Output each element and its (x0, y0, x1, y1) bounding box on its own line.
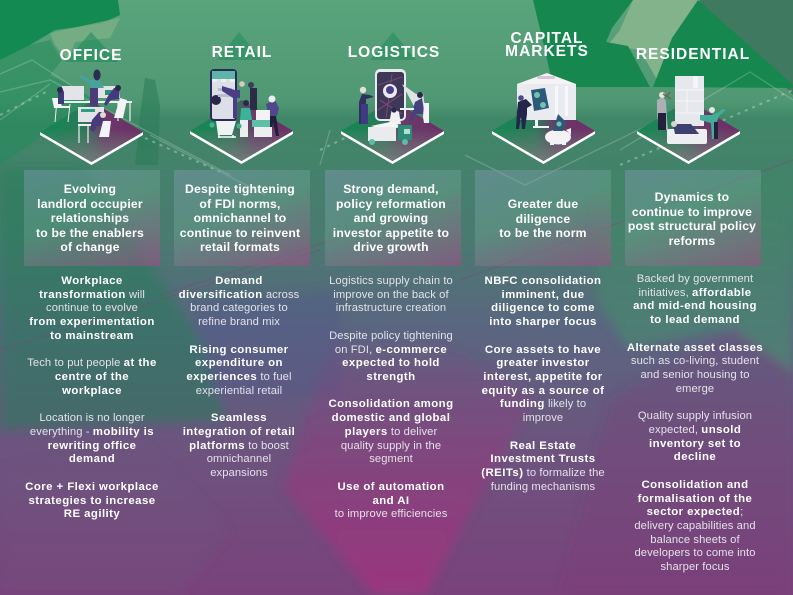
callout: retail headline: omnichannel to (194, 211, 286, 225)
callout: retail headline (174, 170, 310, 266)
text block: office outlook: continue to evolve (46, 302, 138, 314)
text block: office outlook: demand (69, 453, 115, 465)
text block: capital markets outlook: Real Estate (510, 440, 576, 452)
callout: capital markets headline: to be the norm (499, 226, 587, 240)
callout: retail headline: Despite tightening (185, 182, 295, 196)
callout: residential headline: continue to improve (632, 204, 752, 218)
text block: retail outlook: Rising consumer (189, 344, 289, 356)
heading: office: OFFICE (60, 47, 122, 64)
text block: residential outlook: sector expected; (647, 506, 743, 518)
icon: office team at desks on platform (40, 70, 143, 165)
text block: logistics outlook: expected to hold (342, 357, 440, 369)
text block: logistics outlook: infrastructure creation (336, 302, 446, 314)
text block: residential outlook: developers to come into (634, 547, 756, 559)
text block: office outlook: transformation will (39, 289, 145, 301)
text block: office outlook: everything - mobility is (30, 426, 154, 438)
text block: capital markets outlook: (REITs) to formalize the (481, 467, 605, 479)
text block: retail outlook: expenditure on (195, 357, 283, 369)
text block: logistics outlook: strength (366, 371, 416, 383)
text block: retail outlook: experiential retail (196, 385, 282, 397)
text block: retail outlook: expansions (210, 467, 268, 479)
text block: retail outlook: refine brand mix (198, 316, 280, 328)
text block: office outlook: rewriting office (48, 440, 136, 452)
text block: office outlook: to mainstream (50, 330, 134, 342)
callout: retail headline: continue to reinvent (180, 226, 300, 240)
heading: retail: RETAIL (212, 44, 272, 61)
text block: retail outlook: brand categories to (190, 302, 288, 314)
text block: residential outlook: initiatives, affordable (638, 287, 752, 299)
text block: office outlook: Core + Flexi workplace (25, 481, 159, 493)
text block: residential outlook: Consolidation and (642, 479, 748, 491)
callout: office headline: of change (60, 240, 120, 254)
text block: capital markets outlook: into sharper focus (489, 316, 597, 328)
text block: residential outlook: sharper focus (660, 561, 730, 573)
text block: residential outlook: balance sheets of (650, 534, 740, 546)
icon: shoppers with phone storefront on platform (190, 69, 293, 164)
icon: apartment tower and residents on platform (637, 76, 740, 164)
heading: capital markets: MARKETS (505, 43, 589, 60)
panel: residential (625, 46, 763, 573)
text block: logistics outlook: improve on the back of (333, 289, 449, 301)
text block: retail outlook (179, 275, 299, 479)
heading: logistics: LOGISTICS (348, 44, 440, 61)
text block: logistics outlook: Use of automation (337, 481, 444, 493)
text block: office outlook: from experimentation (29, 316, 155, 328)
text block: capital markets outlook: Investment Trusts (490, 453, 596, 465)
text block: logistics outlook: to improve efficiencies (335, 508, 447, 520)
panel: retail (174, 44, 310, 479)
text block: retail outlook: diversification across (179, 289, 299, 301)
text block: retail outlook: Seamless (211, 412, 267, 424)
text block: office outlook: strategies to increase (28, 494, 156, 506)
icon: bank building and piggy bank on platform (492, 73, 595, 164)
callout: capital markets headline: Greater due (508, 197, 578, 211)
callout: office headline: relationships (51, 211, 129, 225)
heading: capital markets (505, 30, 589, 60)
text block: office outlook: Workplace (61, 275, 123, 287)
text block: logistics outlook: Consolidation among (328, 398, 453, 410)
text block: capital markets outlook: funding mechanisms (491, 481, 595, 493)
text block: capital markets outlook: improve (523, 412, 563, 424)
callout: residential headline: Dynamics to (655, 190, 729, 204)
text block: office outlook: Tech to put people at the (27, 357, 157, 369)
text block: logistics outlook: quality supply in the (341, 440, 441, 452)
text block: logistics outlook: domestic and global (332, 412, 450, 424)
panel: office (24, 47, 160, 520)
text block: logistics outlook: Despite policy tightening (329, 330, 453, 342)
panel: capital markets (475, 30, 611, 493)
text block: residential outlook: Quality supply infusion (638, 410, 752, 422)
text block: office outlook: Location is no longer (39, 412, 145, 424)
text block: residential outlook: inventory set to (649, 438, 741, 450)
callout: retail headline: retail formats (200, 240, 280, 254)
text block: logistics outlook: segment (369, 453, 413, 465)
text block: logistics outlook: on FDI, e-commerce (335, 344, 447, 356)
callout: logistics headline: and growing (354, 211, 428, 225)
text block: capital markets outlook: Core assets to have (485, 344, 601, 356)
text block: residential outlook (627, 273, 763, 573)
callout: capital markets headline: diligence (516, 212, 570, 226)
text block: residential outlook: formalisation of the (638, 492, 752, 504)
text block: logistics outlook (328, 275, 453, 520)
text block: residential outlook: Alternate asset classes (627, 342, 763, 354)
callout: office headline: landlord occupier (37, 196, 143, 210)
text block: office outlook: workplace (62, 385, 122, 397)
text block: residential outlook: emerge (676, 383, 714, 395)
text block: office outlook (25, 275, 159, 520)
text block: capital markets outlook: equity as a source of (482, 385, 604, 397)
text block: logistics outlook: and AI (372, 494, 410, 506)
text block: logistics outlook: Logistics supply chain to (329, 275, 453, 287)
callout: logistics headline: policy reformation (336, 196, 446, 210)
callout: residential headline: post structural policy (628, 219, 756, 233)
text block: logistics outlook: players to deliver (345, 426, 437, 438)
callout: office headline (24, 170, 160, 266)
heading: residential: RESIDENTIAL (636, 46, 750, 63)
text block: retail outlook: Demand (215, 275, 263, 287)
text block: office outlook: centre of the (55, 371, 129, 383)
callout: capital markets headline (475, 170, 611, 266)
text block: capital markets outlook: imminent, due (501, 289, 585, 301)
text block: residential outlook: to lead demand (650, 314, 740, 326)
callout: logistics headline (325, 170, 461, 266)
text block: capital markets outlook: NBFC consolidation (485, 275, 601, 287)
text block: residential outlook: and mid-end housing (633, 300, 757, 312)
callout: logistics headline: Strong demand, (343, 182, 439, 196)
callout: residential headline: reforms (669, 234, 715, 248)
text block: retail outlook: platforms to boost (189, 440, 289, 452)
panel: logistics (325, 44, 461, 520)
text block: capital markets outlook: greater investor (496, 357, 590, 369)
text block: capital markets outlook: interest, appetite for (483, 371, 603, 383)
text block: residential outlook: delivery capabilities and (634, 520, 756, 532)
text block: capital markets outlook: diligence to come (491, 302, 595, 314)
text block: retail outlook: omnichannel (207, 453, 271, 465)
heading: capital markets: CAPITAL (510, 30, 584, 47)
callout: office headline: Evolving (64, 182, 116, 196)
callout: logistics headline: investor appetite to (333, 226, 449, 240)
callout: logistics headline: drive growth (353, 240, 429, 254)
text block: office outlook: RE agility (64, 508, 120, 520)
text block: residential outlook: decline (674, 451, 716, 463)
text block: residential outlook: such as co-living, student (631, 355, 759, 367)
text block: retail outlook: integration of retail (183, 426, 295, 438)
icon: logistics phone map and truck on platform (341, 69, 444, 164)
text block: residential outlook: Backed by government (637, 273, 753, 285)
text block: residential outlook: and senior housing to (640, 369, 750, 381)
text block: capital markets outlook: funding likely to (500, 398, 586, 410)
text block: residential outlook: expected, unsold (649, 424, 741, 436)
callout: residential headline (625, 170, 761, 266)
text block: retail outlook: experiences to fuel (186, 371, 292, 383)
text block: capital markets outlook (481, 275, 605, 493)
callout: office headline: to be the enablers (36, 226, 144, 240)
callout: retail headline: of FDI norms, (199, 196, 281, 210)
